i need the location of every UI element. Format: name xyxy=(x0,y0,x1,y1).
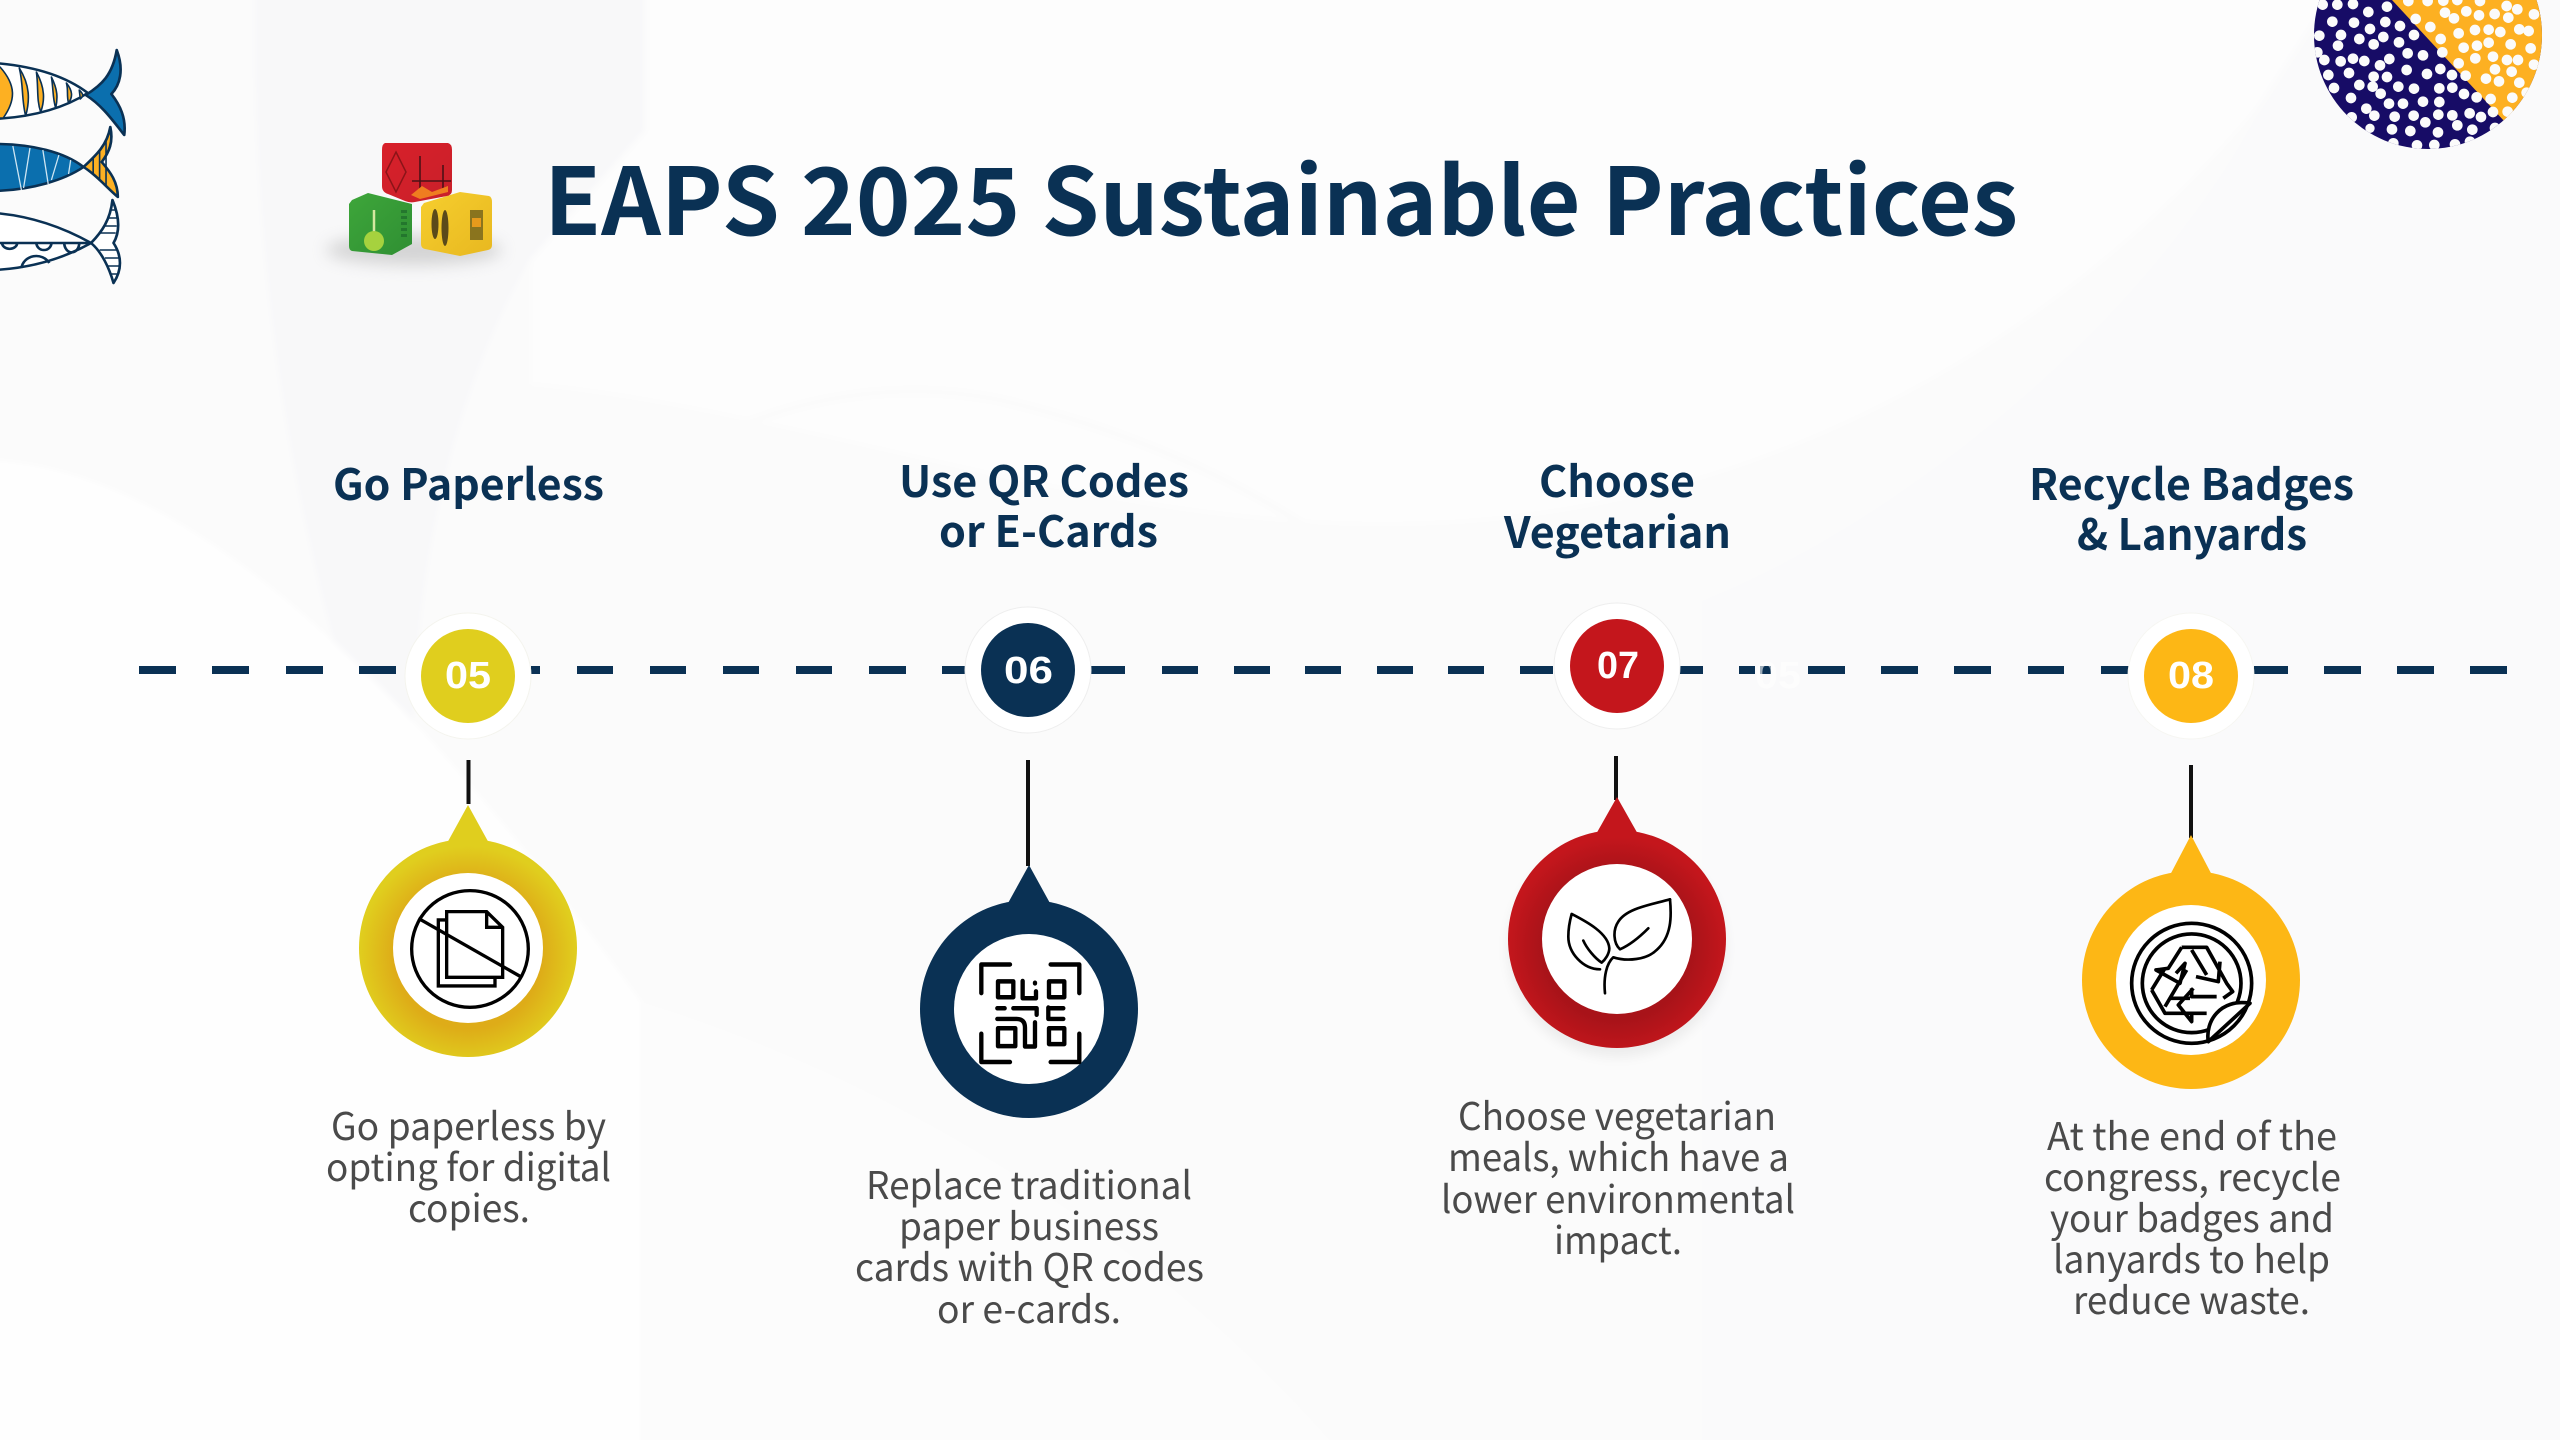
description xyxy=(2044,1106,2341,1325)
connector xyxy=(2189,765,2193,838)
pin ring xyxy=(920,865,1138,1118)
heading: Use QR Codes xyxy=(899,448,1189,510)
decoration: dotted circle xyxy=(2314,0,2542,149)
connector xyxy=(466,760,470,804)
description: meals, which have a xyxy=(1448,1127,1789,1182)
description: lanyards to help xyxy=(2053,1229,2330,1284)
panel: step 06 QR codes xyxy=(855,448,1204,1334)
description: impact. xyxy=(1554,1210,1682,1265)
pin ring xyxy=(1508,797,1726,1057)
number badge: 07 xyxy=(1597,645,1639,687)
connector xyxy=(1026,760,1030,866)
icon: fish illustration xyxy=(0,50,125,283)
icon: no paper xyxy=(412,891,528,1007)
description: reduce waste. xyxy=(2073,1270,2310,1325)
heading: Recycle Badges xyxy=(2029,451,2354,513)
fish: yellow striped xyxy=(0,50,125,135)
heading: Go Paperless xyxy=(333,451,604,513)
fish: white outline xyxy=(0,200,121,283)
dashed timeline xyxy=(139,666,2507,674)
number badge: 05 xyxy=(445,655,491,697)
description: Replace traditional xyxy=(866,1155,1192,1210)
number badge xyxy=(965,607,1091,733)
heading: Vegetarian xyxy=(1503,499,1731,561)
description: Choose vegetarian xyxy=(1458,1086,1776,1141)
heading xyxy=(899,448,1189,560)
heading xyxy=(2029,451,2354,563)
description: your badges and xyxy=(2050,1188,2334,1243)
heading: Choose xyxy=(1539,448,1695,510)
panel: step 05 go paperless xyxy=(326,451,611,1233)
description: paper business xyxy=(899,1196,1159,1251)
icon: QR code xyxy=(981,964,1079,1062)
icon: plant leaves xyxy=(1568,899,1671,993)
description: copies. xyxy=(408,1178,530,1233)
panel: step 08 recycle badges xyxy=(2029,451,2354,1325)
description: At the end of the xyxy=(2047,1106,2337,1161)
description: lower environmental xyxy=(1441,1169,1795,1224)
panel: step 07 choose vegetarian xyxy=(1441,448,1795,1265)
description: congress, recycle xyxy=(2044,1147,2341,1202)
description xyxy=(855,1155,1204,1334)
yellow cube xyxy=(421,192,492,256)
description: or e-cards. xyxy=(937,1279,1121,1334)
green cube xyxy=(349,193,412,255)
heading: or E-Cards xyxy=(939,498,1158,560)
heading xyxy=(1503,448,1731,561)
number badge: 08 xyxy=(2168,655,2214,697)
description: Go paperless by xyxy=(331,1096,606,1151)
icon: recycling sticker xyxy=(2132,923,2252,1043)
icon: three coloured wooden cubes xyxy=(326,143,502,265)
description: opting for digital xyxy=(326,1137,611,1192)
title: EAPS 2025 Sustainable Practices xyxy=(544,127,2018,262)
connector xyxy=(1614,756,1618,800)
red cube xyxy=(382,143,452,202)
pin ring xyxy=(2082,835,2300,1089)
description xyxy=(326,1096,611,1233)
description xyxy=(1441,1086,1795,1265)
number badge: 06 xyxy=(1004,650,1053,692)
number badge xyxy=(2128,613,2254,739)
number badge xyxy=(405,613,531,739)
number badge xyxy=(1554,603,1680,729)
heading: & Lanyards xyxy=(2077,501,2307,563)
description: cards with QR codes xyxy=(855,1237,1204,1292)
faint ghost number: 05 xyxy=(1755,655,1801,697)
pin ring xyxy=(359,805,577,1057)
fish: blue patterned xyxy=(0,127,118,197)
